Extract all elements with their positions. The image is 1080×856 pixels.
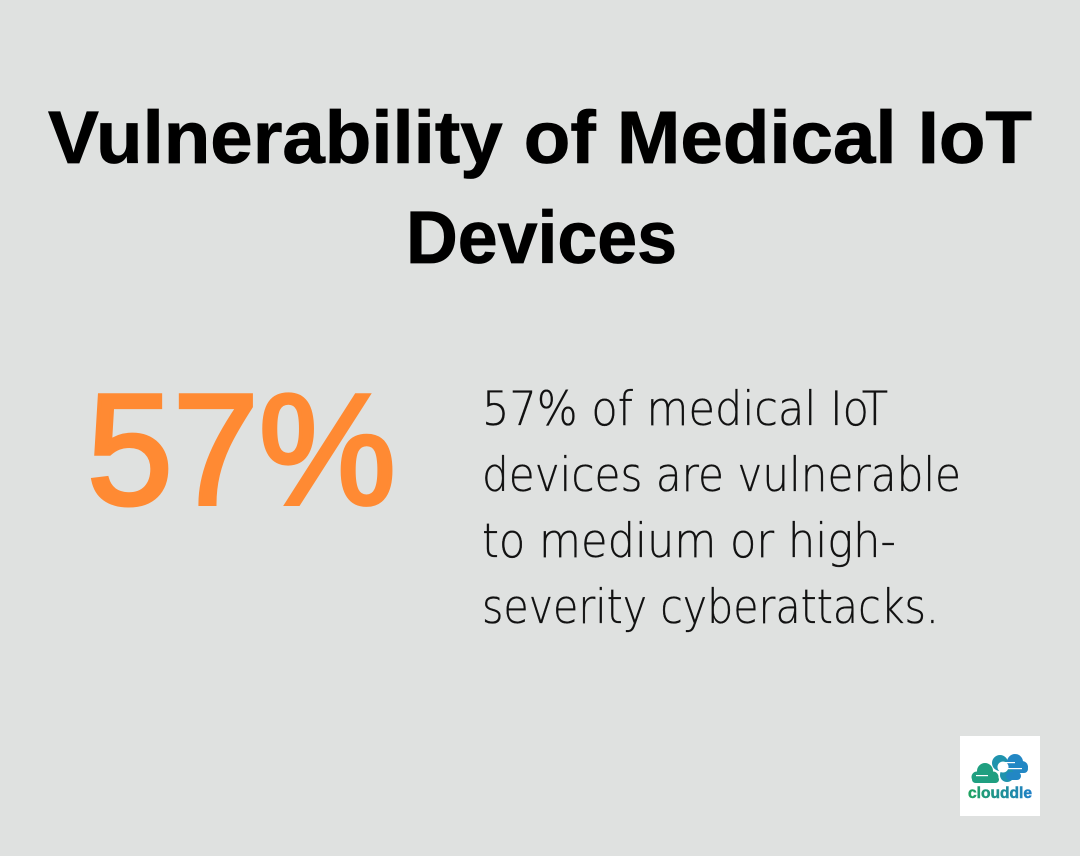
icon: left cloud [972, 763, 999, 783]
title: Vulnerability of Medical IoT [48, 96, 1032, 179]
description text [482, 382, 961, 635]
description text: to medium or high- [482, 514, 896, 569]
title: Devices [406, 196, 677, 279]
logo: clouddle [960, 736, 1040, 816]
icon: right cloud [976, 754, 1028, 782]
big statistic: 57%: 57% [87, 362, 396, 538]
title [48, 96, 1032, 279]
description text: devices are vulnerable [482, 448, 961, 503]
logo wordmark: clouddle [968, 785, 1032, 802]
description text: severity cyberattacks. [482, 580, 939, 635]
description text: 57% of medical IoT [482, 382, 888, 437]
